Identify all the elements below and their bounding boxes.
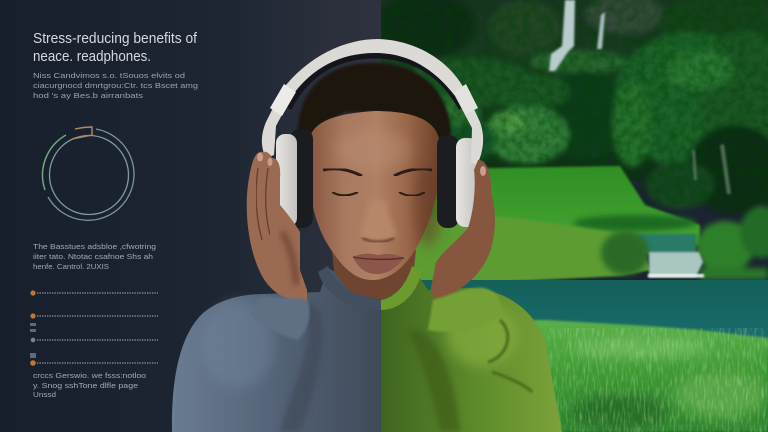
- headband left slider: [270, 84, 296, 116]
- intro text block: hod 's ay Bes.b airranbats: [33, 91, 143, 100]
- green arc: [43, 135, 66, 190]
- cheek shadow right: [415, 163, 441, 247]
- sweater right half: [381, 266, 562, 432]
- pond: [422, 280, 768, 432]
- grey sleeve cuff: [250, 297, 310, 340]
- bottom text block: [33, 371, 146, 399]
- forest hillside: [381, 0, 768, 180]
- middle text block: The Basstues adsbloe ,cfwotring: [33, 242, 156, 251]
- intro text block: Niss Candvimos s.o. tSouos elvits od: [33, 71, 185, 80]
- bottom text block: Unssd: [33, 390, 56, 399]
- intro text block: [33, 71, 198, 100]
- face: [308, 111, 440, 280]
- middle text block: iiter tato. Ntotac csafnoe Shs ah: [33, 252, 153, 261]
- headband inner shadow: [288, 55, 462, 108]
- small cascade: [649, 252, 703, 277]
- row markers: [30, 290, 36, 366]
- closed eyes: [332, 192, 425, 196]
- dark left panel: [0, 0, 381, 432]
- timeline rows: [30, 290, 158, 366]
- right ear cup shell: [456, 138, 478, 227]
- dark bush: [601, 231, 649, 275]
- upper stream pool: [638, 234, 696, 254]
- cascade foam: [648, 274, 704, 278]
- title: Stress-reducing benefits of: [33, 30, 198, 47]
- right hand: [431, 160, 495, 300]
- neck: [332, 250, 416, 300]
- lips: [353, 254, 404, 274]
- ring chart: [43, 127, 134, 220]
- foreground grass: [533, 318, 768, 432]
- nose shadow: [362, 238, 394, 242]
- right bushes: [696, 206, 768, 280]
- headband right slider: [454, 84, 478, 114]
- large tree mass on right: [612, 0, 768, 215]
- tall waterfalls: [549, 0, 605, 71]
- forehead highlight: [334, 130, 410, 170]
- left hand finger creases: [256, 168, 270, 240]
- sweater left half: [172, 268, 381, 432]
- bottom text block: y. Snog sshTone dlfle page: [33, 381, 138, 390]
- sleeve fold right: [488, 320, 532, 392]
- collar right: [381, 266, 422, 310]
- right ear cup cushion: [437, 135, 459, 228]
- tree trunks: [692, 144, 731, 194]
- collar left: [318, 266, 354, 294]
- intro text block: ciacurgnocd dmrtgrou:Ctr. tcs Bscet amg: [33, 81, 198, 90]
- grass blade texture: [545, 328, 768, 432]
- left ear cup cushion: [290, 129, 313, 228]
- small tick glyphs: [30, 323, 36, 358]
- meadow: [430, 164, 702, 246]
- title: neace. readphones.: [33, 48, 151, 65]
- outer ring: [48, 129, 134, 220]
- eyebrows: [323, 169, 432, 176]
- sleeve highlight left: [202, 301, 274, 389]
- middle text block: henfe. Cantrol. 2UXIS: [33, 262, 109, 271]
- tan arc: [72, 127, 92, 139]
- fingertip nails: [257, 152, 486, 176]
- dotted lines: [37, 293, 158, 363]
- shaded meadow edge: [573, 215, 697, 231]
- sleeve highlight right: [446, 303, 518, 367]
- distant hills and trees: [375, 0, 665, 172]
- left ear cup shell: [276, 134, 297, 227]
- lip parting: [353, 257, 404, 259]
- landscape photo panel: [375, 0, 768, 432]
- hair: [298, 63, 451, 156]
- title: [33, 30, 198, 65]
- person with headphones: [172, 39, 562, 432]
- grass highlights: [570, 339, 765, 430]
- bottom text block: crccs Gerswio. we fsss:notloo: [33, 371, 146, 380]
- sleeve shading right: [408, 330, 460, 432]
- green sleeve cuff: [428, 288, 501, 332]
- left hand shadow: [282, 232, 296, 285]
- left hand: [247, 152, 307, 301]
- middle text block: [33, 242, 156, 271]
- sunlit bush bank: [414, 215, 650, 280]
- foliage texture: [381, 0, 768, 205]
- headband: [262, 39, 483, 165]
- inner ring: [50, 136, 128, 214]
- nose: [361, 200, 396, 241]
- sweater: [172, 266, 562, 432]
- sleeve shading left: [272, 295, 322, 432]
